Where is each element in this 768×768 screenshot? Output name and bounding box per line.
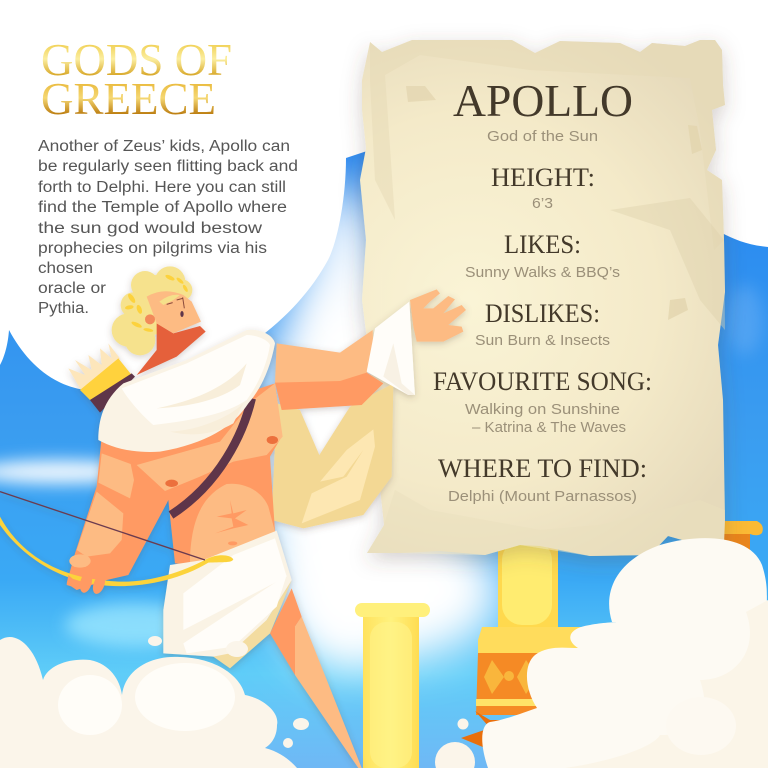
intro paragraph: find the Temple of Apollo where xyxy=(38,199,287,216)
gripping fist xyxy=(67,554,107,596)
central column and orange pedestal xyxy=(461,540,590,768)
profile field: height: HEIGHT: xyxy=(491,163,595,192)
profile field: height xyxy=(491,163,595,212)
profile field: dislikes: DISLIKES: xyxy=(485,299,600,328)
intro paragraph: the sun god would bestow xyxy=(38,220,263,237)
torso xyxy=(103,383,283,565)
leg xyxy=(270,588,362,768)
left arm base xyxy=(67,437,180,590)
intro paragraph: prophecies on pilgrims via his xyxy=(38,240,267,257)
intro paragraph: chosen xyxy=(38,260,93,277)
profile field: where to find: WHERE TO FIND: xyxy=(438,454,647,483)
profile field: likes: Sunny Walks & BBQ’s xyxy=(465,264,620,281)
profile field: favourite song: – Katrina & The Waves xyxy=(472,419,626,436)
bottom-left cloud xyxy=(0,637,297,768)
intro paragraph: oracle or xyxy=(38,280,106,297)
profile field: favourite song xyxy=(433,367,652,436)
open hand xyxy=(410,289,466,342)
bow string xyxy=(0,492,205,560)
cape xyxy=(272,383,393,528)
profile field: height: 6’3 xyxy=(532,195,553,212)
profile heading: Apollo: APOLLO xyxy=(453,76,633,126)
profile field: likes xyxy=(465,230,620,281)
arm cloth xyxy=(367,302,415,395)
intro paragraph: be regularly seen flitting back and xyxy=(38,158,298,175)
right orange column behind scroll xyxy=(722,521,763,562)
Apollo figure xyxy=(0,266,466,768)
laurel wreath xyxy=(125,274,189,333)
left golden column xyxy=(355,603,430,768)
bow xyxy=(0,517,233,586)
white cloud bubble behind intro text xyxy=(0,0,768,390)
intro paragraph: Pythia. xyxy=(38,300,89,317)
neck xyxy=(137,323,206,375)
bottom-right cloud xyxy=(482,538,768,768)
profile field: favourite song: FAVOURITE SONG: xyxy=(433,367,652,396)
parchment scroll xyxy=(360,40,725,556)
quiver and arrows xyxy=(68,343,135,413)
profile field: dislikes xyxy=(475,299,610,349)
profile field: dislikes: Sun Burn & Insects xyxy=(475,332,610,349)
profile field: where to find xyxy=(438,454,647,505)
arm light patches xyxy=(77,453,134,557)
profile field: where to find: Delphi (Mount Parnassos) xyxy=(448,488,637,505)
title: GREECE xyxy=(41,73,216,124)
upper toga xyxy=(98,330,275,452)
profile field: favourite song: Walking on Sunshine xyxy=(465,401,620,418)
face xyxy=(145,291,201,333)
lower toga xyxy=(163,531,292,668)
sash strap xyxy=(171,398,252,515)
hair xyxy=(112,266,192,355)
raised arm xyxy=(275,330,383,410)
profile heading: Apollo: God of the Sun xyxy=(487,128,598,145)
intro paragraph: Another of Zeus’ kids, Apollo can xyxy=(38,138,290,155)
title: GODS OF xyxy=(41,34,232,85)
title xyxy=(41,34,232,124)
profile field: likes: LIKES: xyxy=(504,230,581,259)
intro paragraph: forth to Delphi. Here you can still xyxy=(38,179,286,196)
intro paragraph xyxy=(38,138,298,317)
floating cloud puffs xyxy=(148,636,475,768)
